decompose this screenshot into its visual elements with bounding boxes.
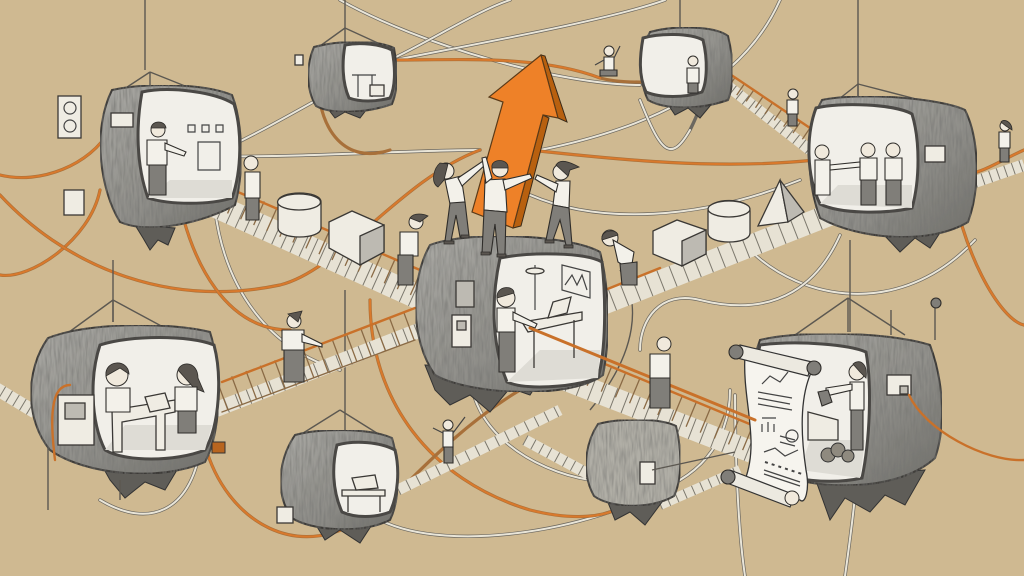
pod: top centre right xyxy=(640,27,732,118)
pod: top right xyxy=(809,84,977,252)
pod: bottom centre xyxy=(277,410,398,543)
speaker and box on top-left pod xyxy=(58,96,133,215)
pod: left xyxy=(31,300,219,510)
pod: top left xyxy=(100,72,241,250)
crates on bridges xyxy=(278,180,804,266)
pod: small top xyxy=(295,28,397,118)
pod: bottom small xyxy=(586,420,735,525)
plug on left pod xyxy=(212,442,225,453)
scroll document xyxy=(721,345,821,507)
figures on bridges xyxy=(244,46,1012,463)
team lifting the arrow xyxy=(434,157,579,257)
big orange arrow xyxy=(472,55,567,228)
pod: right with scroll xyxy=(751,298,1024,520)
pod: centre xyxy=(416,236,755,420)
bridges xyxy=(0,62,1024,505)
